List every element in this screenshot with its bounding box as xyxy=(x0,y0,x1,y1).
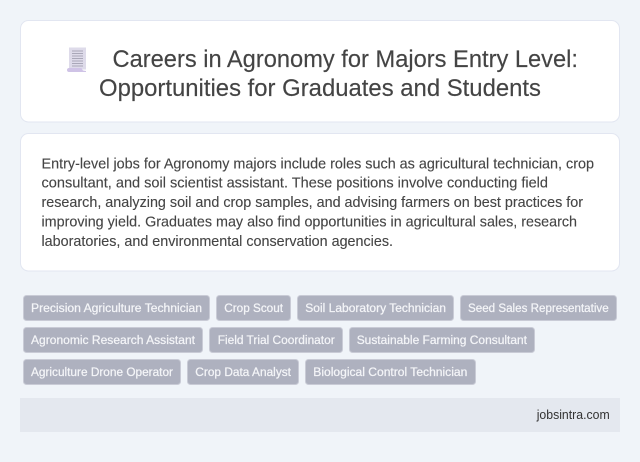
tag: Precision Agriculture Technician: Precision Agriculture Technician xyxy=(31,301,202,315)
description text: Entry-level jobs for Agronomy majors include roles such as agricultural technician, crop xyxy=(42,156,594,172)
tag: Crop Scout: Crop Scout xyxy=(224,301,284,315)
tag: Crop Data Analyst: Crop Data Analyst xyxy=(195,365,292,379)
description text xyxy=(42,156,594,250)
title: Careers in Agronomy for Majors Entry Level: xyxy=(112,46,578,73)
footer source text: jobsintra.com xyxy=(536,408,610,422)
footer bar xyxy=(20,398,620,432)
tag: Biological Control Technician: Biological Control Technician xyxy=(313,365,467,379)
tag: Seed Sales Representative: Seed Sales Representative xyxy=(468,301,609,315)
description text: improving yield. Graduates may also find opportunities in agricultural sales, research xyxy=(42,214,577,230)
description text: consultant, and soil scientist assistant. These positions involve conducting field xyxy=(42,176,548,192)
tag: Agriculture Drone Operator: Agriculture Drone Operator xyxy=(31,365,173,379)
tag: Soil Laboratory Technician xyxy=(298,296,454,320)
tag: Biological Control Technician xyxy=(306,360,476,384)
tag: Agronomic Research Assistant xyxy=(24,328,202,352)
tag: Precision Agriculture Technician xyxy=(24,296,210,320)
tag list xyxy=(24,296,616,384)
icon: document scroll xyxy=(67,48,86,72)
tag: Soil Laboratory Technician: Soil Laboratory Technician xyxy=(305,301,446,315)
description text: research, analyzing soil and crop samples, and advising farmers on best practices for xyxy=(42,195,583,211)
tag: Agronomic Research Assistant: Agronomic Research Assistant xyxy=(31,333,196,347)
tag: Crop Scout xyxy=(216,296,290,320)
tag: Sustainable Farming Consultant: Sustainable Farming Consultant xyxy=(357,333,528,347)
description text: laboratories, and environmental conservation agencies. xyxy=(42,234,393,250)
panel: description card xyxy=(20,134,620,271)
panel: title card xyxy=(20,20,620,122)
tag: Field Trial Coordinator: Field Trial Coordinator xyxy=(218,333,335,347)
tag: Field Trial Coordinator xyxy=(210,328,342,352)
title: Opportunities for Graduates and Students xyxy=(99,75,541,102)
tag: Sustainable Farming Consultant xyxy=(350,328,534,352)
tag: Seed Sales Representative xyxy=(460,296,616,320)
tag: Crop Data Analyst xyxy=(188,360,298,384)
tag: Agriculture Drone Operator xyxy=(24,360,180,384)
title xyxy=(99,46,578,102)
